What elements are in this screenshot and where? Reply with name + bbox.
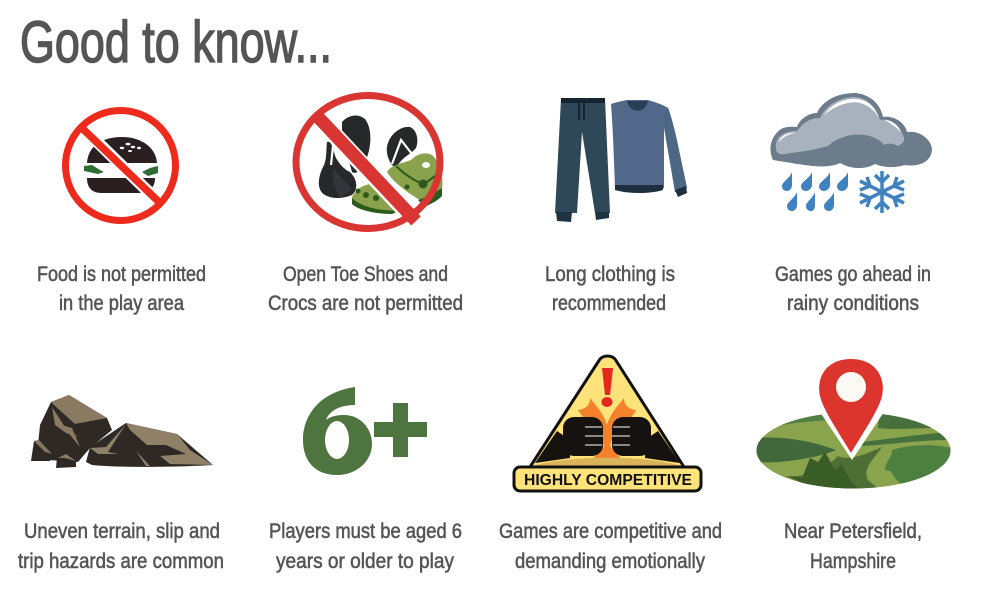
icon: highly competitive warning: HIGHLY COMPETITIVE: [524, 472, 692, 489]
label: terrain: Uneven terrain, slip and: [24, 519, 220, 543]
label: shoes: [268, 262, 463, 315]
icon: map pin on landscape: [750, 359, 955, 492]
label: age: [269, 519, 462, 573]
label: terrain: trip hazards are common: [18, 549, 224, 573]
label: shoes: Open Toe Shoes and: [283, 262, 448, 286]
label: location: Near Petersfield,: [784, 519, 922, 543]
label: competitive: demanding emotionally: [515, 549, 705, 573]
label: rain: rainy conditions: [787, 291, 919, 315]
label: clothing: recommended: [552, 291, 666, 315]
icon: no food: [66, 110, 176, 220]
label: age: Players must be aged 6: [269, 519, 462, 543]
label: food: [37, 262, 206, 315]
icon: highly competitive warning: [514, 356, 701, 491]
title: Good to know...: [20, 10, 332, 75]
label: location: Hampshire: [810, 549, 896, 573]
label: terrain: [18, 519, 224, 573]
icon: 6+: [303, 387, 427, 475]
label: food: in the play area: [59, 291, 184, 315]
label: food: Food is not permitted: [37, 262, 206, 286]
label: age: years or older to play: [276, 549, 454, 573]
icon: rocks: [31, 395, 213, 468]
label: rain: Games go ahead in: [775, 262, 931, 286]
label: clothing: [545, 262, 675, 315]
label: rain: [775, 262, 931, 315]
icon: no open toe shoes or crocs: [296, 96, 443, 228]
label: competitive: Games are competitive and: [499, 519, 722, 543]
label: shoes: Crocs are not permitted: [268, 291, 463, 315]
icon: long clothing: [555, 98, 687, 222]
label: clothing: Long clothing is: [545, 262, 675, 286]
label: location: [784, 519, 922, 573]
label: competitive: [499, 519, 722, 573]
icon: rain and snow cloud: [770, 93, 932, 213]
